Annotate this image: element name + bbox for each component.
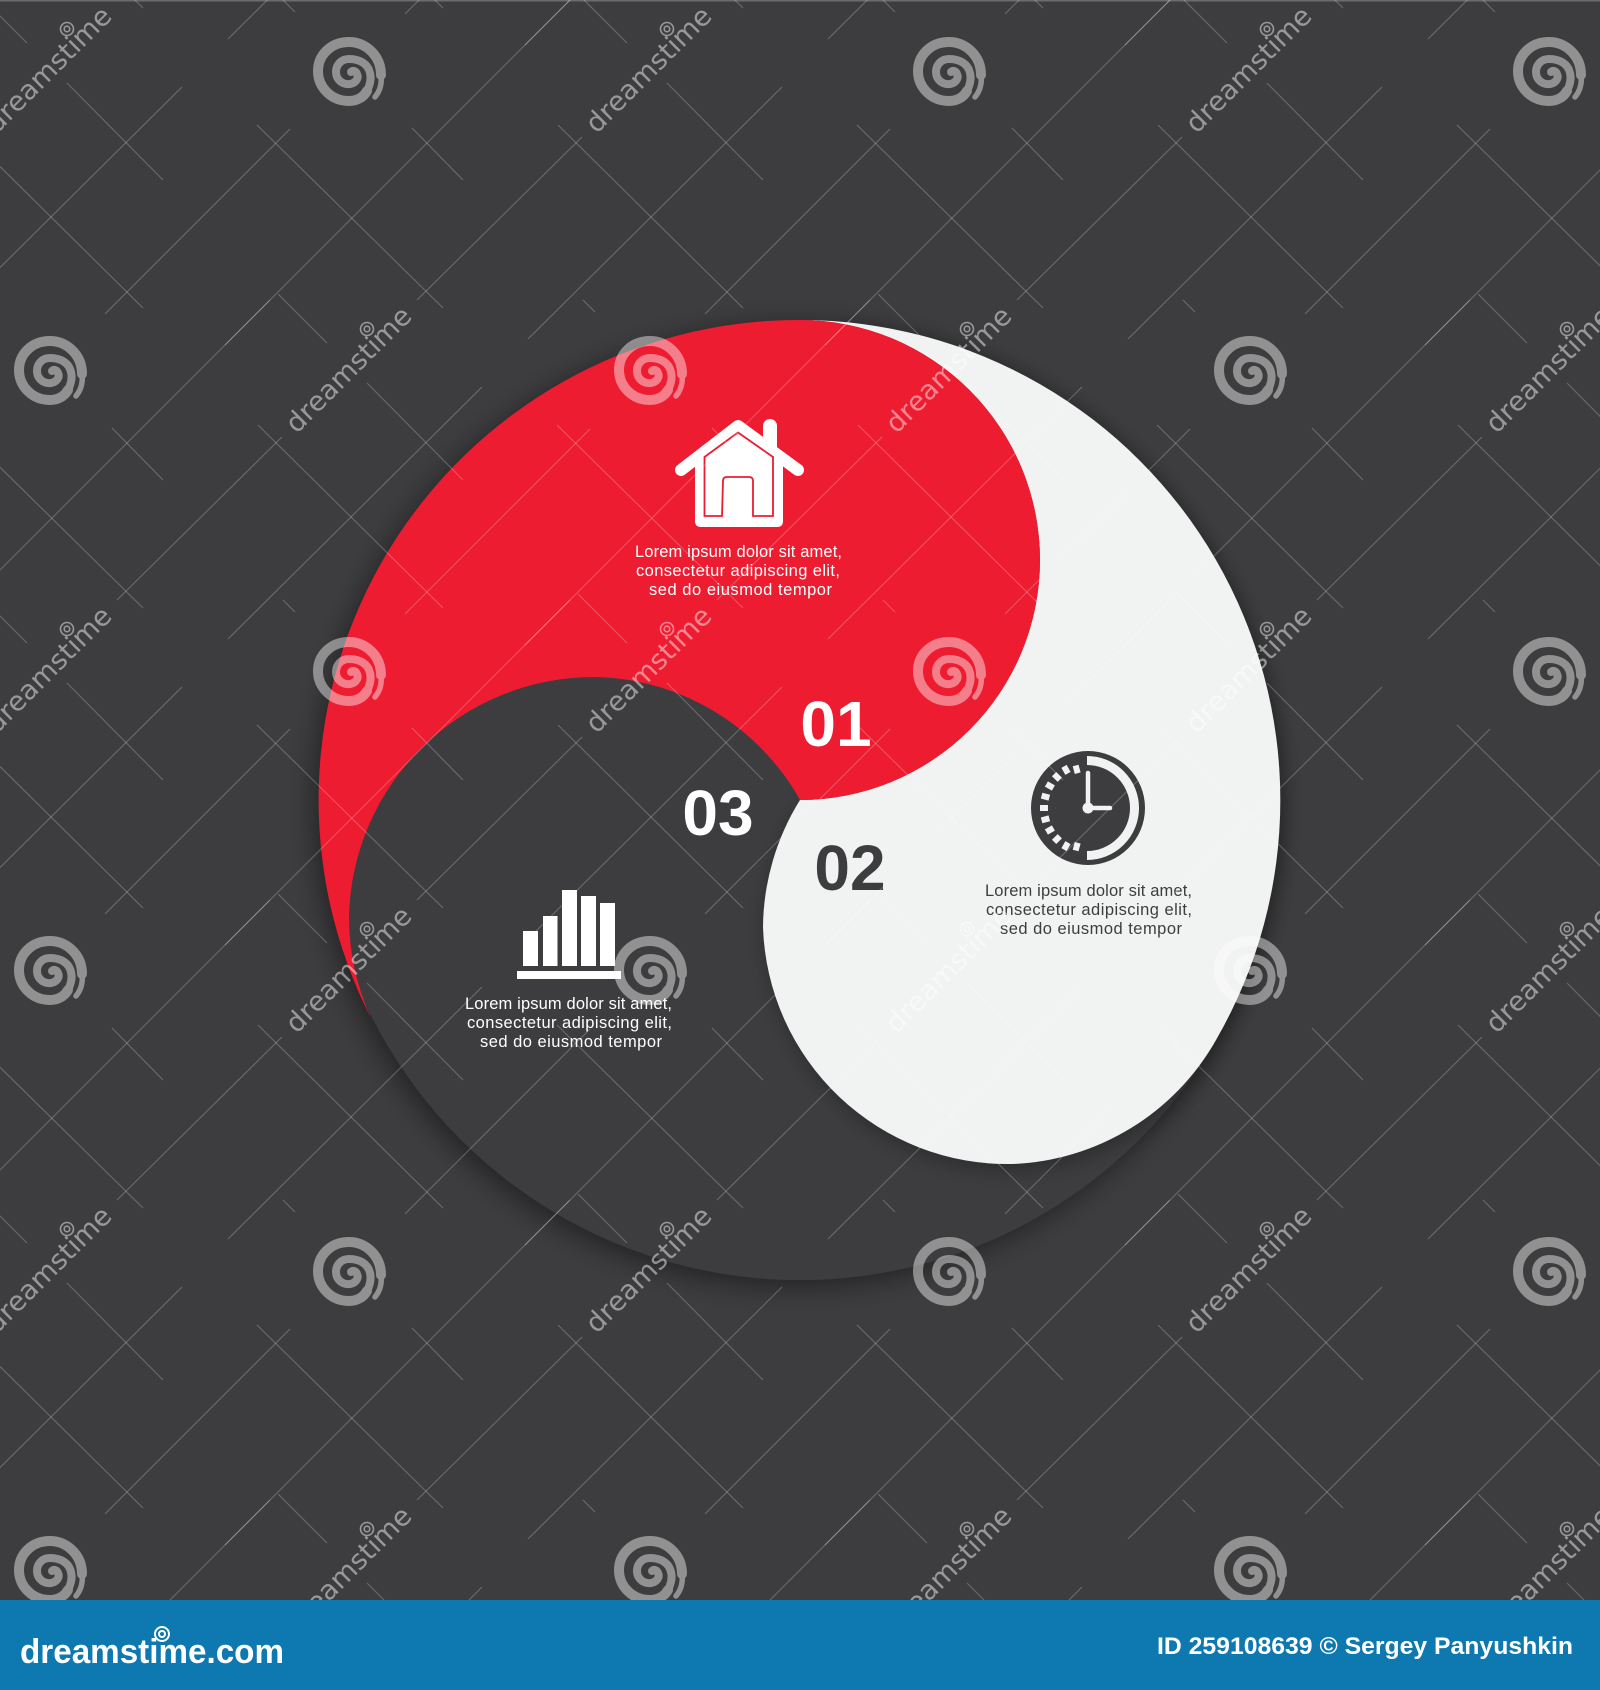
text block 02: sed do eiusmod tempor [1000, 920, 1182, 938]
watermark overlay: dreamstime [280, 901, 418, 1039]
number 01: 01 [800, 688, 872, 760]
text block 02: Lorem ipsum dolor sit amet, [985, 882, 1192, 900]
text block 01: sed do eiusmod tempor [649, 581, 832, 599]
watermark overlay: dreamstime [880, 901, 1018, 1039]
watermark overlay: dreamstime [1180, 1201, 1318, 1339]
footer bar [0, 1600, 1600, 1690]
text block 03: sed do eiusmod tempor [480, 1033, 662, 1051]
watermark overlay: dreamstime [580, 601, 718, 739]
watermark overlay: dreamstime [1180, 601, 1318, 739]
footer logo icon [155, 1627, 169, 1641]
watermark overlay: dreamstime [880, 301, 1018, 439]
segment 03: dark disc [320, 320, 1280, 1280]
watermark overlay: dreamstime [1180, 1, 1318, 139]
icon: bar chart [517, 890, 621, 979]
text block 03: consectetur adipiscing elit, [467, 1014, 672, 1032]
footer credit: ID 259108639 © Sergey Panyushkin [1157, 1633, 1573, 1660]
text block 03: Lorem ipsum dolor sit amet, [465, 995, 672, 1013]
icon: house [681, 419, 798, 527]
number 02: 02 [814, 832, 886, 904]
text block 01: Lorem ipsum dolor sit amet, [635, 543, 842, 561]
watermark overlay: dreamstime [880, 1501, 1018, 1639]
watermark overlay: dreamstime [580, 1, 718, 139]
segment 02: white swirl [763, 320, 1280, 1164]
icon: clock [1031, 751, 1145, 865]
segment 01: red swirl [319, 320, 1040, 1020]
block 01 [635, 419, 872, 760]
text block 02: consectetur adipiscing elit, [986, 901, 1192, 919]
watermark overlay: dreamstime [280, 1501, 418, 1639]
block 03 [465, 777, 754, 1051]
block 02 [814, 751, 1197, 938]
number 03: 03 [682, 777, 754, 849]
watermark overlay: dreamstime [280, 301, 418, 439]
text block 01: consectetur adipiscing elit, [636, 562, 840, 580]
footer logo text: dreamstime.com [20, 1633, 284, 1671]
swirl chart [319, 320, 1280, 1280]
watermark overlay: dreamstime [580, 1201, 718, 1339]
